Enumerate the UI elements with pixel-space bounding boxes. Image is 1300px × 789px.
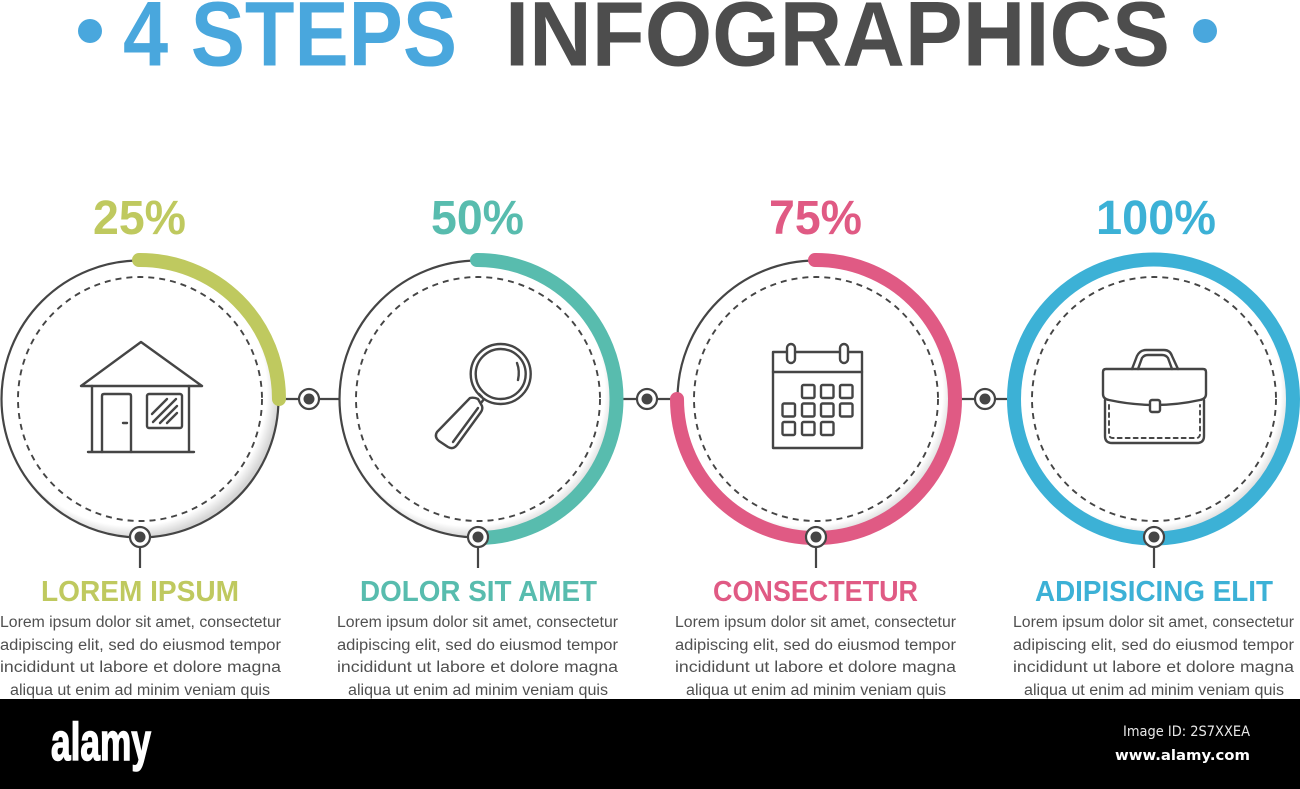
logo: alamy: alamy bbox=[51, 713, 151, 772]
progress ring: 25% bbox=[2, 260, 279, 568]
image id: Image ID: 2S7XXEA bbox=[1123, 724, 1250, 740]
heading: dolor sit amet: DOLOR SIT AMET bbox=[360, 576, 597, 608]
text block: step 4: incididunt ut labore et dolore magna bbox=[1013, 659, 1294, 676]
panel: step 1 bbox=[0, 192, 281, 699]
heading: consectetur: CONSECTETUR bbox=[713, 576, 918, 608]
text block: step 2: adipiscing elit, sed do eiusmod tempor bbox=[337, 637, 618, 654]
icon: briefcase bbox=[1103, 350, 1206, 443]
text block: step 4: adipiscing elit, sed do eiusmod tempor bbox=[1013, 637, 1294, 654]
title bbox=[78, 0, 1217, 86]
percentage: 25%: 25% bbox=[93, 192, 186, 245]
watermark footer bar bbox=[0, 699, 1300, 789]
text block: step 2: aliqua ut enim ad minim veniam quis bbox=[348, 682, 608, 699]
text block: step 1 bbox=[0, 614, 281, 699]
text block: step 4: aliqua ut enim ad minim veniam quis bbox=[1024, 682, 1284, 699]
text block: step 4 bbox=[1013, 614, 1294, 699]
connector: step 1 to step 2 bbox=[285, 389, 339, 409]
text block: step 3: adipiscing elit, sed do eiusmod tempor bbox=[675, 637, 956, 654]
text block: step 1: Lorem ipsum dolor sit amet, consectetur bbox=[0, 614, 281, 631]
percentage: 100%: 100% bbox=[1096, 192, 1216, 245]
progress ring: 100% bbox=[1014, 260, 1293, 568]
icon: house bbox=[81, 342, 202, 452]
icon: magnifying glass bbox=[436, 344, 531, 448]
connector: step 3 to step 4 bbox=[961, 389, 1015, 409]
panel: step 2 bbox=[337, 192, 618, 699]
website: www.alamy.com bbox=[1115, 748, 1250, 764]
text block: step 1: adipiscing elit, sed do eiusmod tempor bbox=[0, 637, 281, 654]
icon: calendar bbox=[773, 344, 862, 448]
text block: step 2: incididunt ut labore et dolore magna bbox=[337, 659, 618, 676]
text block: step 3: incididunt ut labore et dolore magna bbox=[675, 659, 956, 676]
text block: step 4: Lorem ipsum dolor sit amet, consectetur bbox=[1013, 614, 1294, 631]
panel: step 3 bbox=[675, 192, 956, 699]
text block: step 3 bbox=[675, 614, 956, 699]
text block: step 2: Lorem ipsum dolor sit amet, consectetur bbox=[337, 614, 618, 631]
text block: step 1: aliqua ut enim ad minim veniam quis bbox=[10, 682, 270, 699]
percentage: 50%: 50% bbox=[431, 192, 524, 245]
text block: step 1: incididunt ut labore et dolore magna bbox=[0, 659, 281, 676]
progress ring: 50% bbox=[340, 260, 617, 568]
text block: step 2 bbox=[337, 614, 618, 699]
percentage: 75%: 75% bbox=[769, 192, 862, 245]
panel: step 4 bbox=[1013, 192, 1294, 699]
connector: step 2 to step 3 bbox=[623, 389, 677, 409]
text block: step 3: Lorem ipsum dolor sit amet, consectetur bbox=[675, 614, 956, 631]
progress ring: 75% bbox=[677, 260, 955, 568]
heading: adipisicing elit: ADIPISICING ELIT bbox=[1035, 576, 1273, 608]
heading: lorem ipsum: LOREM IPSUM bbox=[41, 576, 239, 608]
text block: step 3: aliqua ut enim ad minim veniam quis bbox=[686, 682, 946, 699]
